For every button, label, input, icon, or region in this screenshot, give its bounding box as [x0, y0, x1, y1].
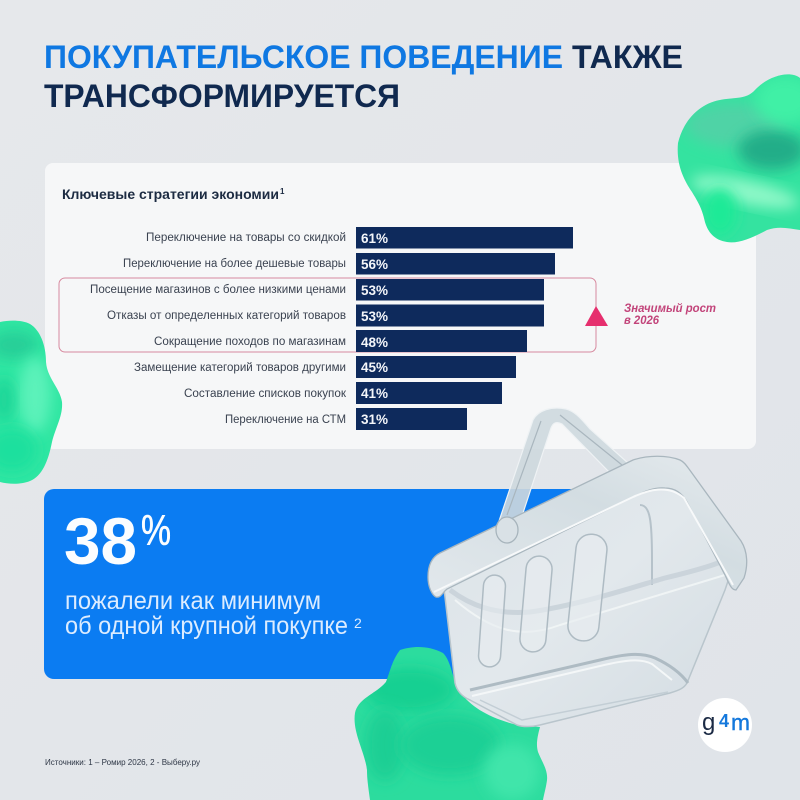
- bar labels: Переключение на более дешевые товары: [123, 258, 346, 270]
- bar values: 45%: [361, 360, 388, 375]
- bar labels: Замещение категорий товаров другими: [134, 362, 346, 374]
- heading footnote mark: 1: [280, 187, 285, 196]
- big number: 38: [64, 504, 137, 578]
- bar values: 61%: [361, 231, 388, 246]
- bar chart: [90, 227, 573, 430]
- icon: growth triangle: [585, 306, 608, 326]
- growth note: Значимый рост: [624, 301, 716, 315]
- basket slots: [478, 533, 608, 668]
- title: ПОКУПАТЕЛЬСКОЕ ПОВЕДЕНИЕ: [44, 39, 563, 75]
- blob: left: [0, 318, 66, 488]
- callout text: пожалели как минимум: [65, 587, 321, 615]
- rim inner edge: [434, 490, 733, 592]
- logo: g: [702, 709, 715, 736]
- bar values: 53%: [361, 283, 388, 298]
- basket rim: [428, 456, 747, 597]
- logo: [698, 698, 752, 752]
- bar labels: Сокращение походов по магазинам: [154, 336, 346, 348]
- logo: m: [731, 710, 750, 735]
- basket handle: [495, 408, 628, 533]
- basket inner shading: [450, 505, 725, 720]
- title: ТРАНСФОРМИРУЕТСЯ: [44, 78, 400, 114]
- bar values: 56%: [361, 257, 388, 272]
- bar labels: Переключение на СТМ: [225, 414, 346, 426]
- callout text: об одной крупной покупке: [65, 612, 348, 640]
- blob: bottom: [350, 640, 555, 800]
- blob: top right: [678, 74, 800, 242]
- bar labels: Отказы от определенных категорий товаров: [107, 310, 346, 322]
- callout text: [65, 587, 362, 640]
- callout text: 2: [354, 615, 362, 631]
- bar values: [361, 231, 388, 427]
- bar labels: Посещение магазинов с более низкими ценами: [90, 284, 346, 296]
- highlight bracket: [59, 278, 596, 352]
- basket body: [440, 465, 735, 726]
- title: ТАКЖЕ: [572, 39, 683, 75]
- bar values: 31%: [361, 412, 388, 427]
- growth note: [624, 301, 716, 327]
- source note: Источники: 1 – Ромир 2026, 2 - Выберу.ру: [45, 758, 200, 767]
- bar labels: Составление списков покупок: [184, 388, 347, 400]
- bar labels: [90, 232, 347, 426]
- handle pivot: [496, 517, 518, 543]
- bar values: 53%: [361, 309, 388, 324]
- panel: 38 percent callout: [44, 489, 604, 679]
- bar labels: Переключение на товары со скидкой: [146, 232, 346, 244]
- bars: [356, 227, 573, 430]
- panel: savings strategies: [45, 163, 756, 449]
- percent sign: %: [141, 507, 171, 555]
- bar values: 48%: [361, 335, 388, 350]
- growth note: в 2026: [624, 313, 659, 327]
- logo: 4: [719, 711, 729, 731]
- bar values: 41%: [361, 386, 388, 401]
- chart heading: Ключевые стратегии экономии: [62, 186, 279, 202]
- title: [44, 39, 683, 114]
- icon: glass shopping basket: [428, 408, 747, 726]
